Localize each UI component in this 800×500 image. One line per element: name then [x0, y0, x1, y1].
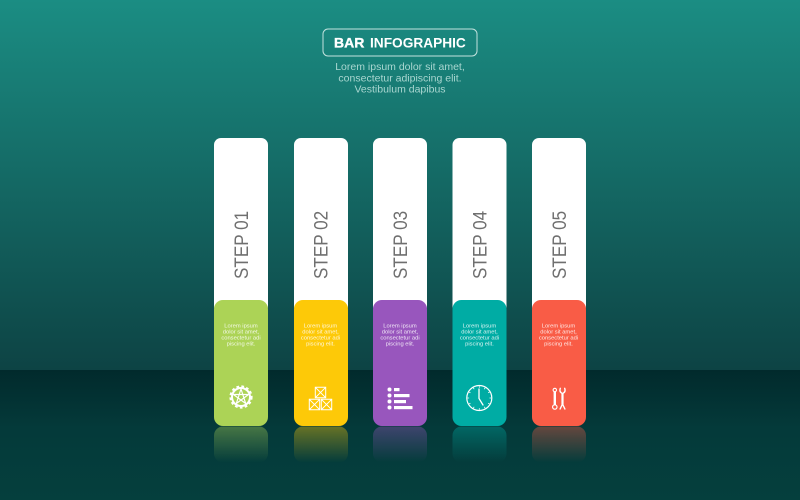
step 02 bar	[294, 138, 348, 462]
title badge: BAR	[334, 34, 364, 50]
reflection 03	[373, 426, 427, 457]
description 01: consectetur adi	[221, 336, 261, 342]
subtitle text: Lorem ipsum dolor sit amet,	[335, 61, 465, 73]
description 04	[460, 324, 499, 348]
label 05: STEP 05	[549, 211, 570, 279]
reflection 05	[532, 426, 586, 462]
description 04: consectetur adi	[460, 336, 499, 342]
description 03: Lorem ipsum	[383, 324, 417, 330]
description 02: Lorem ipsum	[304, 324, 337, 330]
reflection 04	[452, 426, 506, 456]
icon: two wrenches	[553, 388, 565, 409]
step 03 bar	[373, 138, 427, 462]
background floor	[0, 370, 800, 500]
icon: clock	[467, 386, 492, 410]
colored card 04	[452, 300, 506, 426]
white tab 02	[294, 138, 348, 313]
description 05	[539, 324, 578, 348]
title badge: INFOGRAPHIC	[370, 36, 466, 50]
subtitle text: Vestibulum dapibus	[354, 84, 446, 96]
step 01 bar	[214, 138, 268, 462]
icon: gear	[230, 386, 252, 408]
description 01	[221, 324, 261, 348]
colored card 05	[532, 300, 586, 426]
icon: stacked boxes	[309, 387, 332, 410]
description 03: dolor sit amet,	[382, 330, 419, 336]
description 05: dolor sit amet,	[540, 330, 577, 336]
colored card 03	[373, 300, 427, 426]
white tab 01	[214, 138, 268, 313]
reflection 01	[214, 426, 268, 458]
description 04: Lorem ipsum	[463, 324, 496, 330]
description 01: piscing elit.	[227, 342, 256, 348]
icon: list	[388, 388, 412, 410]
label 01: STEP 01	[231, 211, 252, 279]
label 04: STEP 04	[470, 211, 491, 279]
description 03: consectetur adi	[380, 336, 420, 342]
reflection 02	[294, 426, 348, 462]
label 03: STEP 03	[390, 211, 411, 279]
description 03	[380, 324, 420, 348]
white tab 05	[532, 138, 586, 313]
step 04 bar	[452, 138, 506, 462]
subtitle text	[335, 61, 465, 96]
description 01: dolor sit amet,	[223, 330, 260, 336]
background wall	[0, 0, 800, 370]
description 02: dolor sit amet,	[302, 330, 339, 336]
description 01: Lorem ipsum	[224, 324, 258, 330]
description 04: piscing elit.	[465, 342, 494, 348]
description 02: consectetur adi	[301, 336, 340, 342]
description 02: piscing elit.	[306, 342, 335, 348]
colored card 01	[214, 300, 268, 426]
colored card 02	[294, 300, 348, 426]
description 05: Lorem ipsum	[542, 324, 575, 330]
step 05 bar	[532, 138, 586, 462]
label 02: STEP 02	[311, 211, 332, 279]
description 02	[301, 324, 340, 348]
title badge	[323, 29, 477, 56]
description 05: piscing elit.	[544, 342, 573, 348]
description 05: consectetur adi	[539, 336, 578, 342]
white tab 03	[373, 138, 427, 313]
white tab 04	[452, 138, 506, 313]
description 04: dolor sit amet,	[461, 330, 498, 336]
description 03: piscing elit.	[386, 342, 415, 348]
subtitle text: consectetur adipiscing elit.	[338, 72, 462, 84]
